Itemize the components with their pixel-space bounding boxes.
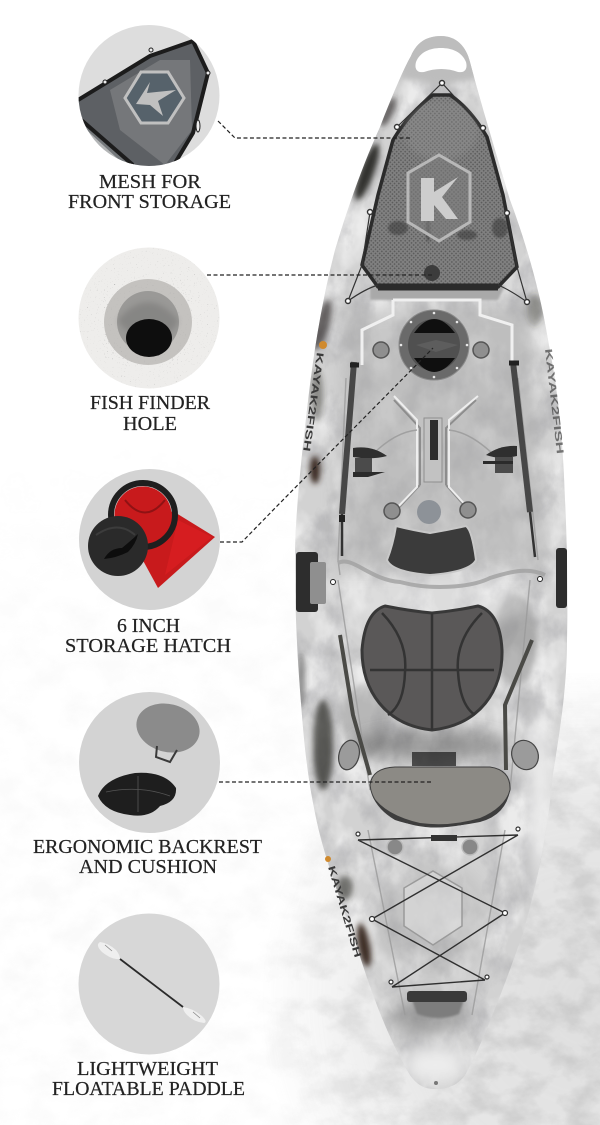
foot rails and pedals xyxy=(339,362,535,557)
front mesh storage xyxy=(346,80,530,304)
rear handle xyxy=(407,991,467,1018)
seat straps xyxy=(340,635,532,775)
label xyxy=(68,171,231,213)
brand text on hull: KAYAK2FISH xyxy=(325,865,363,959)
rod holders xyxy=(373,342,489,855)
storage hatch on kayak xyxy=(399,310,469,380)
background: snow texture xyxy=(271,697,600,1125)
side gunwale shading xyxy=(338,378,545,1015)
rear bungee cords xyxy=(356,827,520,987)
label: AND CUSHION xyxy=(79,856,217,878)
mesh bungee xyxy=(348,83,527,302)
label: FLOATABLE PADDLE xyxy=(52,1078,245,1100)
circle background xyxy=(79,469,220,610)
label: MESH FOR xyxy=(99,171,202,193)
icon: backrest xyxy=(131,697,205,762)
icon: cushion xyxy=(98,773,176,816)
brand text on hull: KAYAK2FISH xyxy=(300,352,325,452)
kayak top view xyxy=(285,30,575,1095)
scupper plates xyxy=(335,736,543,774)
kayak hull xyxy=(285,30,575,1095)
brand text on hull xyxy=(300,341,565,959)
label: HOLE xyxy=(123,413,177,435)
brand text on hull: KAYAK2FISH xyxy=(542,348,565,455)
feature: backrest and cushion xyxy=(33,692,262,878)
dashed leader lines xyxy=(207,121,434,782)
icon: paddle xyxy=(98,942,206,1023)
icon: hatch, lid and red bag xyxy=(88,483,215,588)
label: FISH FINDER xyxy=(90,392,211,414)
foot pad xyxy=(387,526,476,575)
carry handle xyxy=(415,48,467,72)
feature: storage hatch xyxy=(65,469,231,657)
circle background xyxy=(79,692,220,833)
circle photo: mesh xyxy=(78,25,220,170)
label: 6 INCH xyxy=(117,615,180,637)
label: ERGONOMIC BACKREST xyxy=(33,836,262,858)
circle background xyxy=(78,914,220,1054)
cockpit moulding xyxy=(362,300,512,512)
hexagon K logo xyxy=(408,155,470,241)
feature: fish finder hole xyxy=(78,247,220,435)
label: FRONT STORAGE xyxy=(68,191,231,213)
label xyxy=(52,1058,245,1100)
feature: mesh for front storage xyxy=(68,25,231,213)
stern fitting xyxy=(434,1081,438,1085)
side handles xyxy=(296,548,567,612)
label xyxy=(90,392,211,435)
circle photo: hole xyxy=(78,247,220,389)
rear hexagon emboss xyxy=(404,871,462,945)
feature: floatable paddle xyxy=(52,914,245,1100)
label xyxy=(65,615,231,657)
seat backrest on kayak xyxy=(370,752,510,827)
label xyxy=(33,836,262,878)
seat pad xyxy=(362,606,502,730)
label: LIGHTWEIGHT xyxy=(77,1058,218,1080)
label: STORAGE HATCH xyxy=(65,635,231,657)
